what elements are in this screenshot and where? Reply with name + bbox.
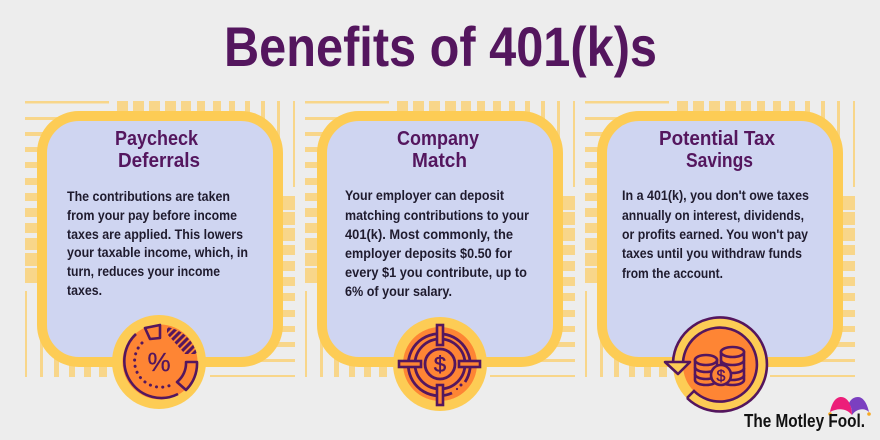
title: Benefits of 401(k)s — [224, 15, 657, 78]
icon: dollar target — [393, 317, 487, 411]
text: paycheck deferrals — [67, 189, 248, 298]
text: paycheck deferrals: from your pay before income — [67, 208, 237, 223]
heading: paycheck deferrals: Paycheck — [115, 127, 199, 150]
heading: paycheck deferrals — [115, 127, 200, 172]
heading: company match: Company — [397, 127, 480, 150]
text: company match: employer deposits $0.50 for — [345, 246, 513, 261]
panel: paycheck deferrals — [25, 101, 295, 409]
card: potential tax savings — [602, 116, 838, 362]
text: potential tax savings: annually on interest, dividends, — [622, 208, 804, 223]
text: potential tax savings: taxes until you withdraw funds — [622, 246, 802, 261]
heading: potential tax savings: Savings — [686, 149, 753, 172]
text: paycheck deferrals: taxes are applied. This lowers — [67, 227, 243, 242]
text: potential tax savings: In a 401(k), you don't owe taxes — [622, 188, 809, 203]
icon: coins with return arrow: $ — [717, 368, 726, 385]
heading: company match: Match — [412, 149, 467, 172]
logo: The Motley Fool — [744, 397, 871, 431]
heading: company match — [397, 127, 480, 172]
text: potential tax savings — [622, 188, 809, 281]
text: paycheck deferrals: turn, reduces your income — [67, 264, 220, 279]
panel: company match — [305, 101, 575, 411]
text: paycheck deferrals: The contributions are taken — [67, 189, 230, 204]
text: potential tax savings: from the account. — [622, 266, 723, 281]
icon: jester hat — [828, 397, 871, 416]
icon: dollar target: $ — [434, 352, 446, 377]
card: company match — [322, 116, 558, 362]
panel: potential tax savings — [585, 101, 855, 412]
text: company match: 6% of your salary. — [345, 284, 452, 299]
text: company match: 401(k). Most commonly, the — [345, 227, 513, 242]
heading: potential tax savings — [659, 127, 776, 172]
icon: percent dial — [112, 315, 206, 409]
heading: potential tax savings: Potential Tax — [659, 127, 776, 150]
text: potential tax savings: or profits earned. You won't pay — [622, 227, 808, 242]
text: company match: Your employer can deposit — [345, 188, 504, 203]
text: paycheck deferrals: your taxable income, which, in — [67, 245, 248, 260]
card: paycheck deferrals — [42, 116, 278, 362]
icon: percent dial: % — [147, 347, 171, 377]
text: company match: matching contributions to your — [345, 208, 530, 223]
heading: paycheck deferrals: Deferrals — [118, 149, 200, 172]
icon: coins with return arrow — [665, 317, 767, 412]
text: company match — [345, 188, 530, 299]
text: paycheck deferrals: taxes. — [67, 283, 102, 298]
text: company match: every $1 you contribute, up to — [345, 265, 527, 280]
